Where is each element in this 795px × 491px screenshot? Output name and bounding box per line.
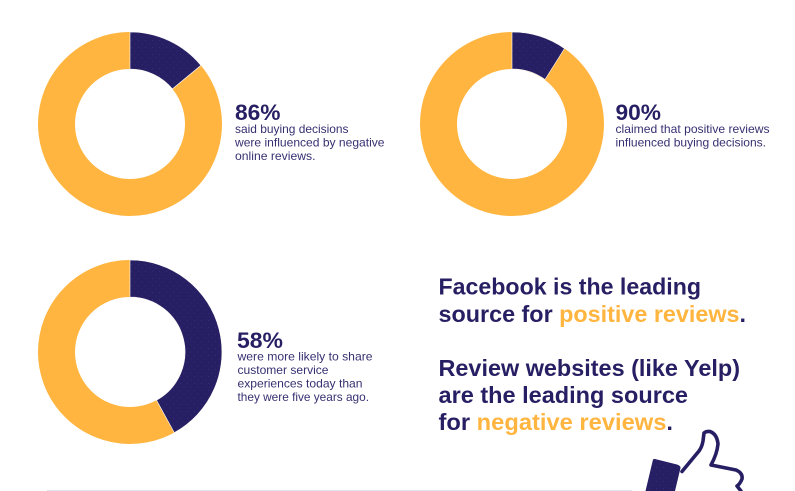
- donut chart: 58%: [56, 260, 222, 433]
- stat: 86%: said buying decisions: [235, 122, 348, 136]
- heading: review websites: Review websites (like Yelp): [438, 355, 740, 381]
- stat: 90%: claimed that positive reviews: [616, 122, 770, 136]
- stat: 90%: 90%: [616, 100, 661, 125]
- divider line: [47, 490, 632, 491]
- heading: Facebook: source for positive reviews.: [438, 301, 746, 327]
- donut chart: 86%: [56, 32, 204, 198]
- stat: 90%: [616, 100, 770, 150]
- stat: 58%: they were five years ago.: [238, 390, 369, 404]
- heading: review websites: [438, 355, 740, 435]
- icon: thumbs up: [646, 431, 742, 491]
- stat: 86%: online reviews.: [235, 149, 316, 163]
- stat: 58%: 58%: [237, 328, 283, 353]
- heading: review websites: for negative reviews.: [438, 409, 673, 435]
- stat: 58%: were more likely to share: [236, 350, 373, 364]
- stat: 58%: [236, 328, 373, 404]
- stat: 90%: influenced buying decisions.: [616, 136, 766, 150]
- heading: review websites: are the leading source: [438, 382, 688, 408]
- heading: Facebook: Facebook is the leading: [438, 274, 701, 300]
- stat: 86%: [234, 100, 385, 163]
- heading: Facebook: [438, 274, 746, 327]
- stat: 58%: experiences today than: [238, 376, 362, 390]
- stat: 58%: customer service: [238, 363, 329, 377]
- stat: 86%: 86%: [235, 100, 280, 125]
- donut chart: 90%: [438, 32, 586, 198]
- stat: 86%: were influenced by negative: [234, 136, 385, 150]
